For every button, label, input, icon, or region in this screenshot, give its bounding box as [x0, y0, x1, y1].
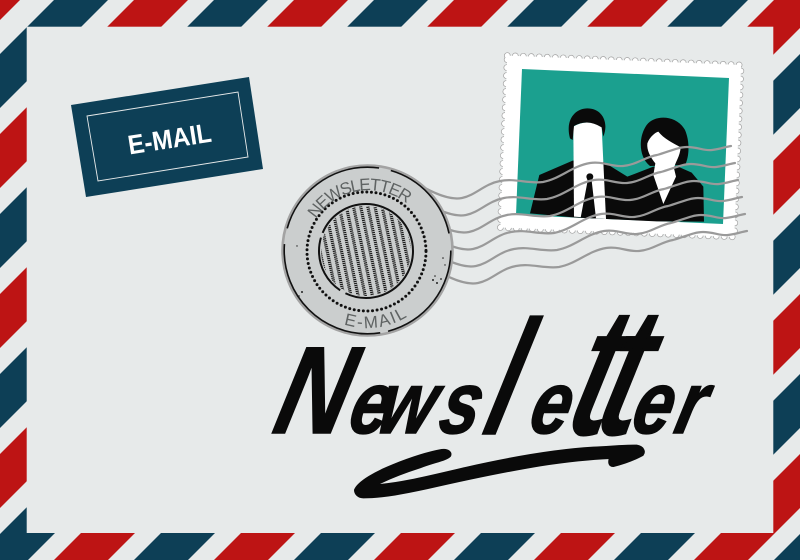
woman face and neck	[647, 132, 681, 204]
postmark disc	[282, 166, 452, 336]
newsletter script title: e	[624, 355, 687, 453]
stamp portrait: two business people	[530, 108, 704, 222]
postmark dotted ring	[307, 192, 426, 311]
newsletter script title: r	[667, 355, 723, 453]
postmark text: newsletter: NEWSLETTER	[307, 178, 411, 218]
wavy postmark cancellation lines	[425, 146, 747, 284]
postmark broken inner rim	[284, 167, 451, 334]
man tie	[581, 173, 596, 218]
newsletter script title: w	[370, 355, 453, 453]
stamp perforated paper	[500, 56, 741, 237]
brush underline swoosh	[355, 446, 644, 497]
man hair	[569, 108, 605, 140]
postmark hatching	[321, 206, 411, 296]
newsletter script title: N	[264, 321, 372, 460]
newsletter script title: s	[431, 355, 495, 453]
newsletter script title: l	[473, 289, 550, 468]
round postmark stamp	[281, 164, 454, 337]
newsletter script title: e	[522, 355, 585, 453]
postmark text: e-mail: E-MAIL	[345, 310, 407, 328]
newsletter script title: e	[341, 355, 404, 453]
e-mail label	[71, 77, 263, 197]
newsletter script title: t	[584, 271, 679, 472]
postmark centre circle	[319, 204, 413, 298]
e-mail label: E-MAIL	[126, 118, 213, 160]
newsletter script title: t	[555, 271, 650, 472]
man shirt and face	[573, 122, 606, 219]
postmark specks	[296, 245, 446, 297]
man jacket	[530, 161, 704, 222]
woman hair	[641, 118, 689, 166]
stamp teal picture	[516, 69, 729, 224]
postage stamp	[500, 56, 741, 237]
